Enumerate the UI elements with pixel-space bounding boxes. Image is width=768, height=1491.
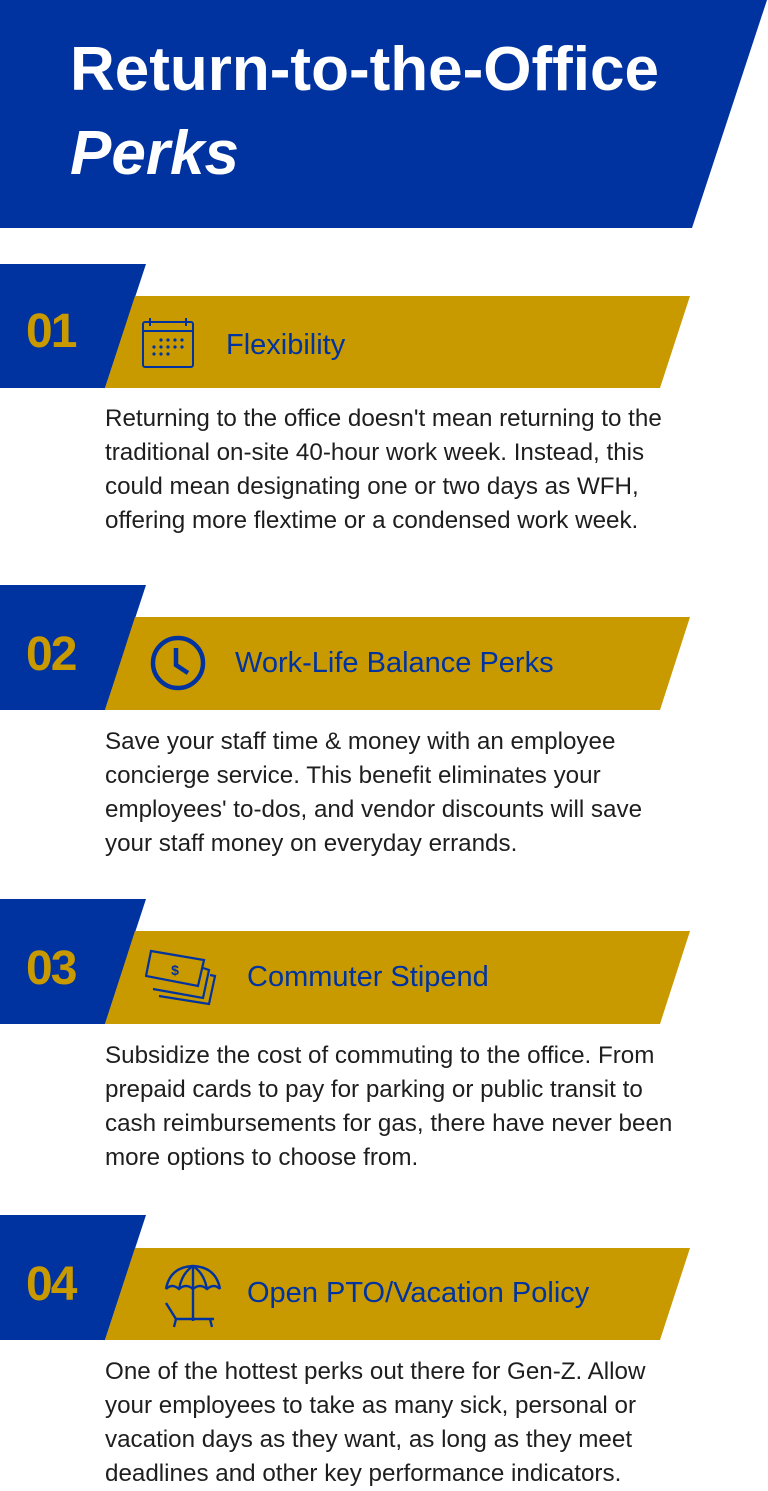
title [70, 35, 659, 188]
section 4 [26, 1258, 646, 1487]
body text: Save your staff time & money with an employee concierge service. This benefit eliminates your employees' to-dos, and vendor discounts will save your staff money on everyday errands. [105, 728, 642, 857]
body text: Subsidize the cost of commuting to the office. From prepaid cards to pay for parking or public transit to cash reimbursements for gas, there have never been more options to choose from. [105, 1042, 672, 1171]
icon: clock [150, 636, 206, 690]
section 2 [26, 628, 642, 857]
icon: beach umbrella [164, 1264, 222, 1328]
section 3 [26, 942, 672, 1171]
icon: calendar [142, 318, 194, 368]
title: Perks [70, 119, 239, 188]
icon: money [145, 950, 216, 1006]
body text: One of the hottest perks out there for Gen-Z. Allow your employees to take as many sick, personal or vacation days as they want, as long as they meet deadlines and other key performance indicators. [105, 1358, 645, 1487]
header banner [0, 0, 767, 228]
title: Flexibility: Flexibility [226, 329, 345, 361]
title: Commuter Stipend: Commuter Stipend [247, 961, 489, 993]
body text: Returning to the office doesn't mean returning to the traditional on-site 40-hour work week. Instead, this could mean designating one or two days as WFH, offering more flextime or a condensed work week. [105, 405, 662, 534]
number 02: 02 [26, 628, 75, 681]
title: Work-Life Balance Perks: Work-Life Balance Perks [235, 647, 554, 679]
icon: money: $ [171, 962, 179, 978]
title: Open PTO/Vacation Policy: Open PTO/Vacation Policy [247, 1277, 589, 1309]
number 04: 04 [26, 1258, 75, 1311]
section 1 [26, 305, 662, 534]
title: Return-to-the-Office [70, 35, 659, 104]
number 03: 03 [26, 942, 75, 995]
number 01: 01 [26, 305, 75, 358]
